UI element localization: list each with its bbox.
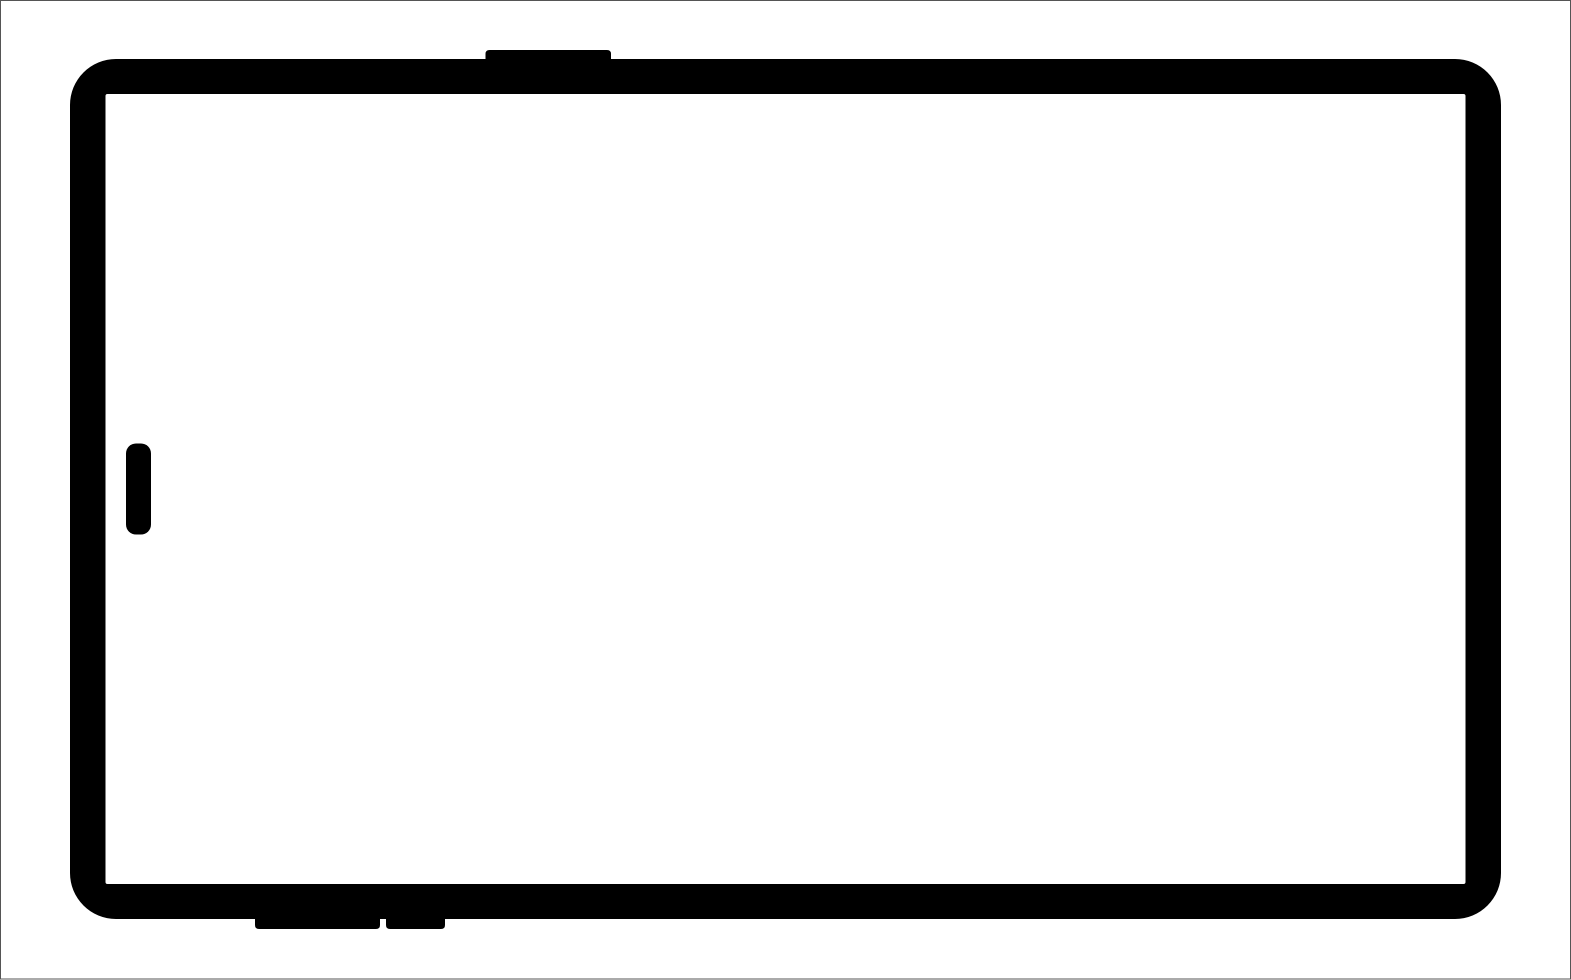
tablet body frame <box>70 59 1501 919</box>
bottom volume button left <box>255 915 380 929</box>
bottom volume button right <box>386 915 445 929</box>
top power button <box>486 50 611 62</box>
home button pill <box>126 444 151 534</box>
